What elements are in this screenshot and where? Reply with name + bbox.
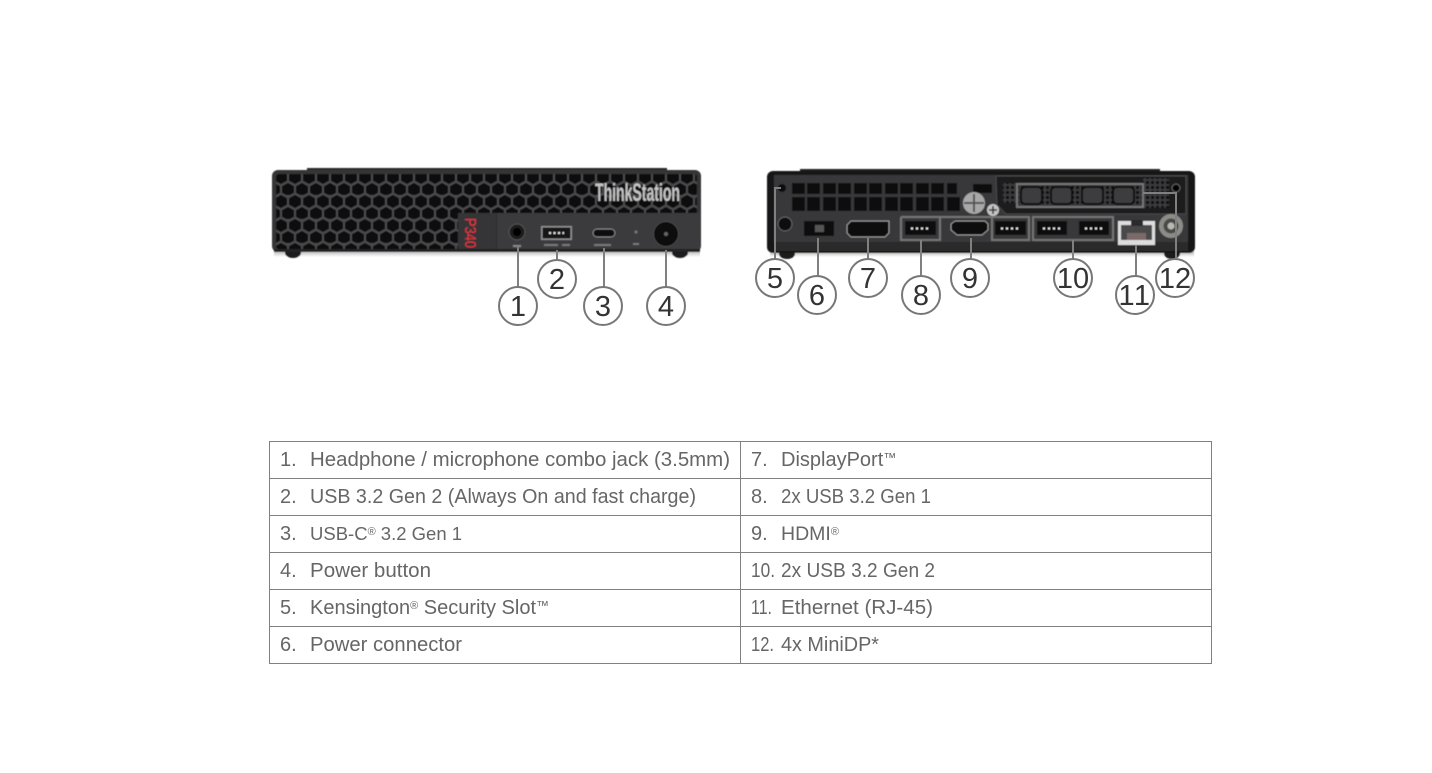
callout 12: [1143, 193, 1194, 297]
callout 11: 11: [1118, 280, 1152, 312]
legend row 3 left: USB-C: [310, 523, 368, 544]
legend row 4 left: Power button: [310, 560, 431, 582]
legend row 3 left: ®: [368, 526, 376, 538]
legend row 6 right: 4x MiniDP*: [781, 634, 879, 656]
legend row 6 left: 6.: [280, 634, 297, 656]
ThinkStation logo: ThinkStation: [595, 179, 680, 207]
rear USB ports: [905, 221, 1109, 235]
port legend table: [270, 442, 1212, 664]
legend row 1 right: 7.: [751, 449, 768, 471]
callout 3: 3: [595, 291, 611, 323]
legend row 5 left: Security Slot: [418, 597, 536, 619]
headphone jack: [509, 224, 525, 246]
callout 4: [647, 250, 685, 325]
status LED: [633, 230, 639, 244]
callout 5: [756, 188, 794, 297]
USB-C port: [593, 229, 615, 245]
legend row 5 left: [280, 597, 549, 619]
table grid: [270, 442, 1212, 664]
Kensington slot: [778, 217, 792, 231]
legend row 3 left: [280, 523, 462, 545]
top left screw hole: [778, 184, 786, 192]
legend row 5 right: Ethernet (RJ-45): [781, 597, 933, 619]
callout 10: 10: [1057, 263, 1089, 295]
legend row 2 left: USB 3.2 Gen 2 (Always On and fast charge): [310, 486, 696, 508]
USB group outlines: [901, 217, 1113, 240]
legend row 6 right: 12.: [751, 634, 774, 656]
thumbscrews: [963, 192, 999, 216]
callout 1: 1: [510, 291, 526, 323]
front chassis: [272, 168, 701, 258]
callout 4: 4: [658, 291, 674, 323]
legend row 5 left: 5.: [280, 597, 297, 619]
legend row 2 right: 2x USB 3.2 Gen 1: [781, 486, 931, 508]
callout 5: 5: [767, 263, 783, 295]
legend row 1 right: DisplayPort: [781, 449, 883, 471]
callout 2: 2: [549, 264, 565, 296]
coaxial connector: [1159, 214, 1183, 238]
callout 6: 6: [809, 280, 825, 312]
callout 11: [1116, 245, 1154, 314]
power connector: [804, 221, 834, 236]
legend row 1 left: Headphone / microphone combo jack (3.5mm): [310, 449, 730, 471]
callout 6: [798, 238, 836, 314]
legend row 2 right: 8.: [751, 486, 768, 508]
callout 2: [538, 250, 576, 298]
legend row 4 right: 2x USB 3.2 Gen 2: [781, 560, 935, 582]
legend row 1 left: 1.: [280, 449, 297, 471]
legend row 5 left: ™: [536, 598, 549, 613]
callout 9: [951, 238, 989, 297]
rear view of computer: [767, 169, 1195, 259]
legend row 5 right: 11.: [751, 597, 772, 619]
callout 8: [902, 240, 940, 314]
legend row 2 left: 2.: [280, 486, 297, 508]
P340 model label: P340: [461, 218, 478, 248]
legend row 3 right: [751, 523, 839, 545]
front view of computer: [272, 168, 701, 258]
legend row 3 left: 3.: [280, 523, 297, 545]
DisplayPort: [847, 221, 889, 237]
legend row 3 left: 3.2 Gen 1: [376, 523, 462, 544]
rear chassis: [767, 169, 1195, 259]
legend row 3 right: 9.: [751, 523, 768, 545]
ventilation grille: [792, 183, 992, 211]
callout 12: 12: [1159, 263, 1191, 295]
callout 10: [1054, 240, 1092, 297]
HDMI port: [951, 221, 988, 235]
callout 7: [849, 238, 887, 297]
legend row 4 left: 4.: [280, 560, 297, 582]
callout 7: 7: [860, 263, 876, 295]
front USB port: [541, 226, 572, 245]
MiniDP module: [996, 176, 1186, 214]
legend row 1 right: ™: [883, 450, 896, 465]
callout 1: [499, 247, 537, 325]
callout 9: 9: [962, 263, 978, 295]
legend row 5 left: Kensington: [310, 597, 410, 619]
legend row 4 right: 10.: [751, 560, 775, 582]
legend row 5 left: ®: [410, 600, 418, 612]
callout 8: 8: [913, 280, 929, 312]
legend row 3 right: HDMI: [781, 523, 831, 545]
power button: [654, 222, 678, 246]
Ethernet port: [1118, 220, 1155, 245]
legend row 6 left: Power connector: [310, 634, 462, 656]
callout 3: [584, 248, 622, 325]
legend row 3 right: ®: [831, 526, 839, 538]
